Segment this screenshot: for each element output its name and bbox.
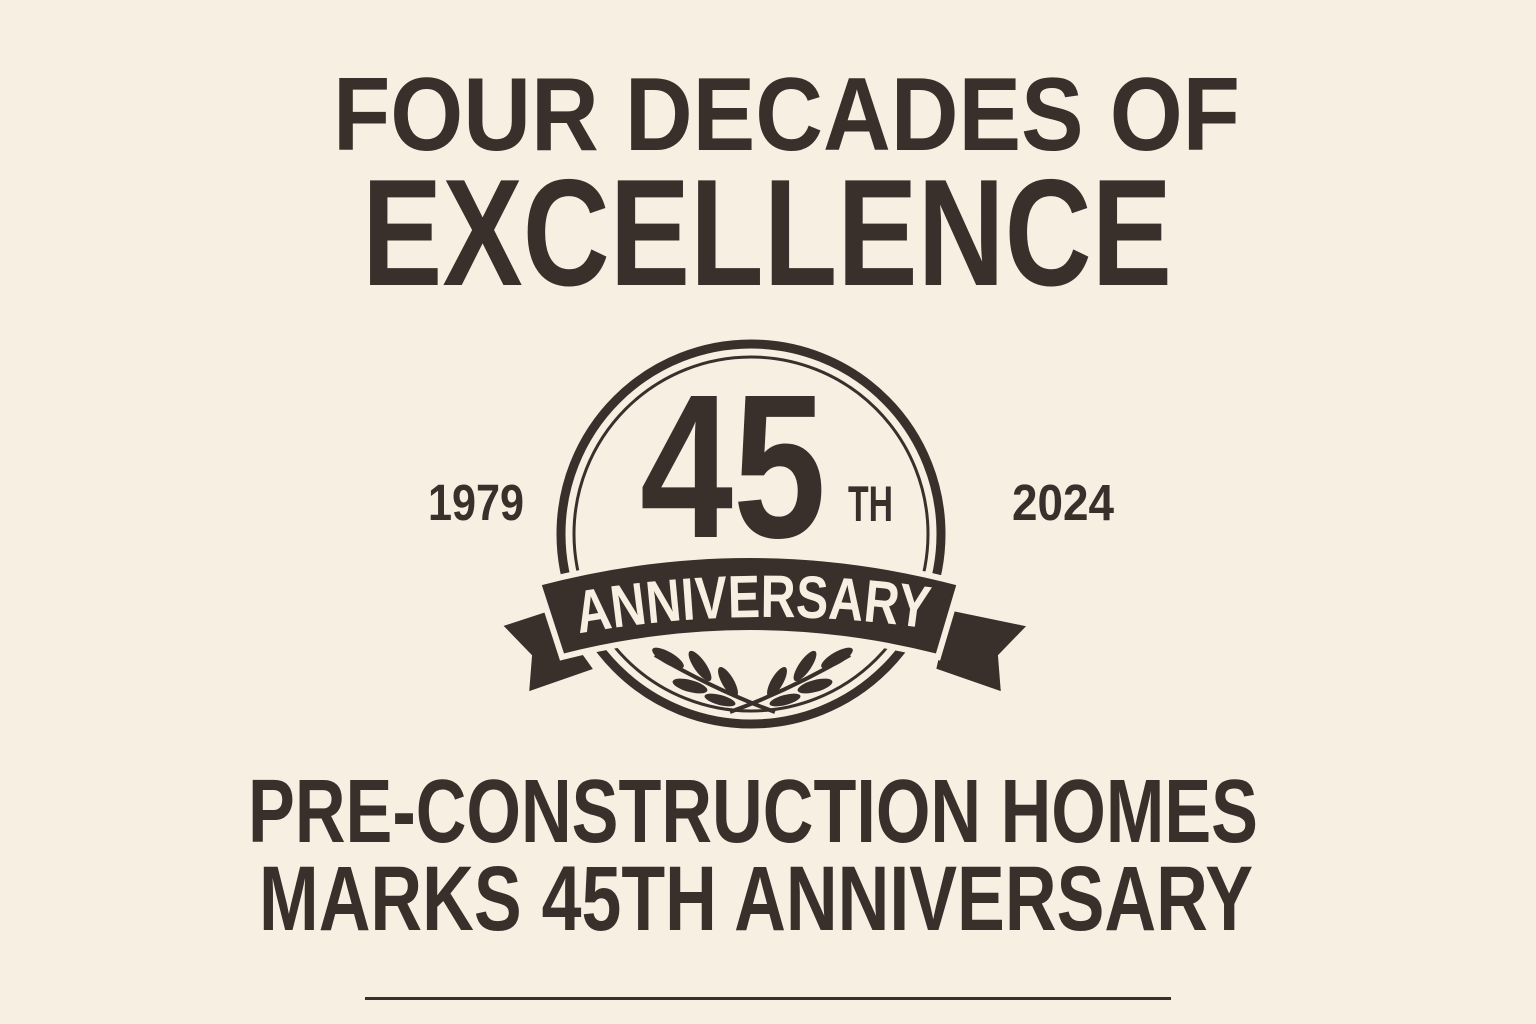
title: EXCELLENCE xyxy=(362,148,1172,318)
year: 2024: 2024 xyxy=(1012,474,1115,531)
subtitle: MARKS 45TH ANNIVERSARY xyxy=(259,848,1253,950)
subtitle xyxy=(248,762,1258,950)
title: FOUR DECADES OF xyxy=(333,57,1240,173)
laurel branches xyxy=(649,644,856,712)
ribbon text: ANNIVERSARY xyxy=(580,576,932,634)
subtitle: PRE-CONSTRUCTION HOMES xyxy=(248,762,1258,862)
title xyxy=(333,57,1240,318)
ribbon tails xyxy=(500,608,1030,694)
year: 1979: 1979 xyxy=(428,474,524,531)
ribbon band xyxy=(538,555,960,657)
TH suffix: TH xyxy=(848,476,893,532)
number 45: 45 xyxy=(640,352,826,581)
badge: 45th anniversary emblem xyxy=(504,340,1026,728)
